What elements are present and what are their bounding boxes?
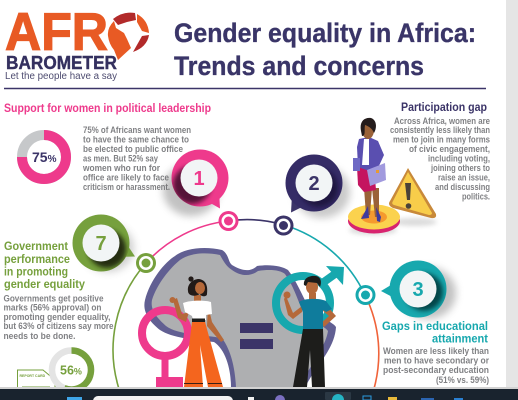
body text: women who run for <box>82 163 160 173</box>
logo tagline: Let the people have a say <box>5 71 117 82</box>
heading: Participation gap <box>401 102 487 114</box>
man figure <box>284 276 336 387</box>
heading <box>4 239 85 291</box>
node: navy <box>274 216 294 236</box>
taskbar start icon <box>67 397 82 400</box>
taskbar search box <box>93 396 233 400</box>
body text: politics. <box>462 192 490 202</box>
heading: performance <box>4 252 70 266</box>
body text: men to have secondary or <box>384 356 489 366</box>
node: pink <box>218 211 238 231</box>
panel: support for women in political leadership <box>4 103 228 216</box>
heading <box>382 319 488 346</box>
body text: be elected to public office <box>83 144 183 154</box>
body text: needs to be done. <box>4 331 76 341</box>
badge 1 <box>163 150 228 216</box>
body text <box>383 346 489 385</box>
illustration: businesswoman on platform <box>348 118 400 235</box>
body text: criticism or harassment. <box>83 182 170 192</box>
timeline nodes <box>136 211 376 305</box>
panel: government performance <box>4 214 135 392</box>
body text <box>4 294 114 341</box>
female symbol <box>142 310 188 387</box>
body text: consistently less likely than <box>390 125 490 135</box>
taskbar app icons <box>248 392 463 400</box>
icon: report card: REPORT CARD <box>20 374 46 378</box>
timeline arc <box>113 220 379 392</box>
body text: office are likely to face <box>83 172 169 182</box>
body text: men to join in many forms <box>393 134 490 144</box>
body text: marks (56% approval) on <box>4 302 102 312</box>
node: green <box>136 253 156 273</box>
badge 1: 1 <box>193 168 205 190</box>
donut chart 75%: 75% <box>32 149 57 165</box>
node: teal <box>356 285 376 305</box>
heading: gender equality <box>4 277 85 291</box>
icon: warning sign <box>389 168 437 226</box>
heading: Gaps in educational <box>382 319 488 333</box>
body text: raise an issue, <box>438 172 490 182</box>
body text <box>390 116 490 202</box>
badge 2: 2 <box>308 173 320 195</box>
heading: Government <box>4 239 68 253</box>
Africa map <box>144 248 336 387</box>
donut chart 56% with report card <box>18 350 91 392</box>
title: Gender equality in Africa: <box>174 18 476 48</box>
title <box>174 18 476 81</box>
body text: Governments get positive <box>4 294 104 304</box>
title: Trends and concerns <box>174 51 424 81</box>
body text: Women are less likely than <box>383 346 489 356</box>
logo wordmark AFR: AFR <box>5 3 108 62</box>
body text: but 63% of citizens say more <box>4 321 114 331</box>
body text: as men. But 52% say <box>83 154 159 164</box>
body text <box>82 125 191 192</box>
heading: in promoting <box>4 264 68 278</box>
logo: Afrobarometer <box>5 3 149 82</box>
body text: of civic engagement, <box>409 144 490 154</box>
donut chart 75% <box>22 135 66 179</box>
illustration: Africa map with gender equality figures <box>142 248 344 387</box>
panel: participation gap <box>286 102 490 235</box>
window scrollbar gutter <box>506 0 518 388</box>
windows taskbar <box>0 387 518 400</box>
body text: 75% of Africans want women <box>83 125 191 135</box>
heading: Support for women in political leadership <box>4 103 211 115</box>
body text: promoting gender equality, <box>4 312 110 322</box>
body text: to have the same chance to <box>83 134 189 144</box>
heading: attainment <box>432 332 488 346</box>
body text: Across Africa, women are <box>394 116 490 126</box>
panel: gaps in educational attainment <box>381 260 489 385</box>
body text: including voting, <box>428 154 490 164</box>
body text: and discussing <box>435 182 490 192</box>
equals sign <box>240 323 273 349</box>
badge 7: 7 <box>95 233 107 255</box>
body text: (51% vs. 59%) <box>436 375 489 385</box>
male symbol <box>276 266 344 330</box>
woman figure <box>170 276 224 387</box>
donut chart 56% with report card: 56% <box>60 364 82 378</box>
body text: post-secondary education <box>383 365 489 375</box>
body text: joining others to <box>430 163 490 173</box>
badge 7 <box>72 214 135 272</box>
logo globe with Africa <box>108 13 149 60</box>
badge 2 <box>286 154 350 218</box>
badge 3: 3 <box>412 279 424 301</box>
logo wordmark BAROMETER: BAROMETER <box>6 53 117 73</box>
